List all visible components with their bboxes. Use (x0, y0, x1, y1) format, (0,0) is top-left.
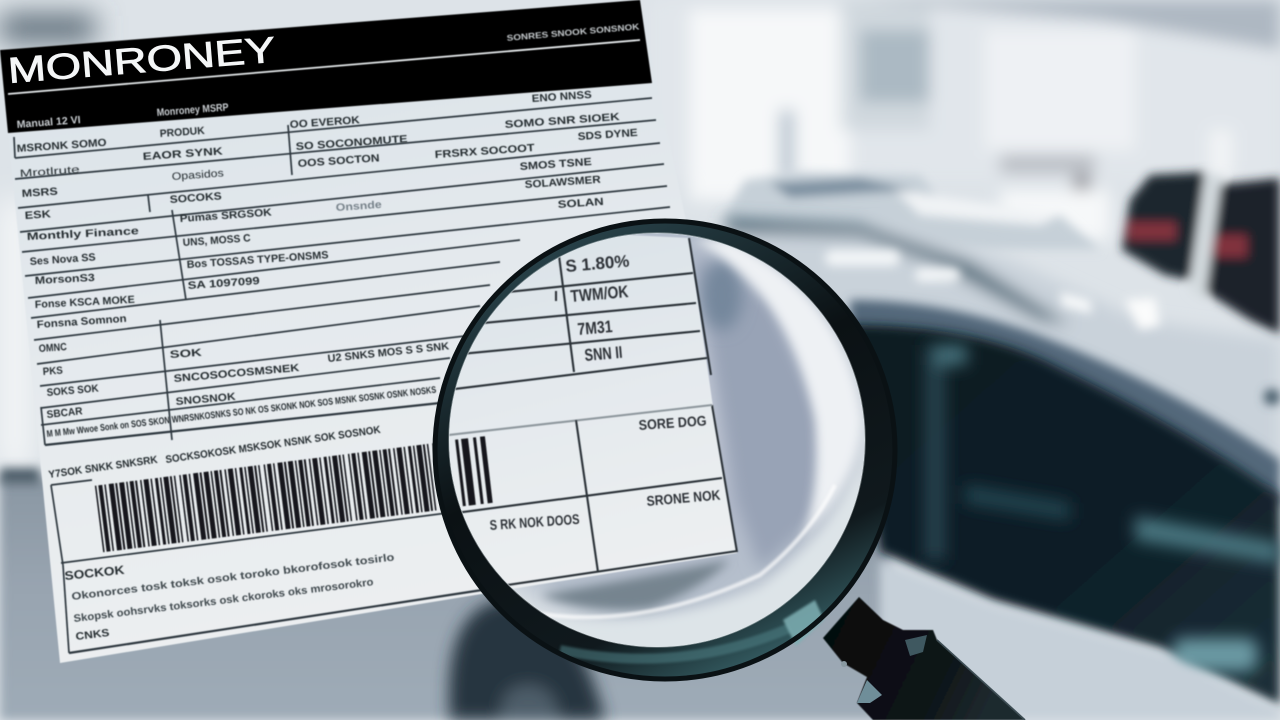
small print on sticker: Pumas SRGSOK (179, 207, 272, 225)
lower glass reflection (547, 478, 862, 647)
small print on sticker (16, 89, 638, 643)
magnified sticker paper (449, 234, 738, 589)
handle collar highlight (905, 635, 927, 656)
lens frame (433, 219, 897, 681)
small print on sticker: MSRS (21, 186, 58, 200)
small print on sticker: Bos TOSSAS TYPE-ONSMS (186, 249, 329, 271)
small print on sticker: PKS (42, 365, 63, 378)
small print on sticker: UNS, MOSS C (182, 232, 251, 249)
small print on sticker: SO SOCONOMUTE (295, 133, 408, 153)
barcode (99, 470, 489, 519)
sticker paper (16, 42, 483, 664)
left background strips (0, 15, 95, 470)
small print on sticker: FRSRX SOCOOT (434, 142, 536, 161)
distant car (725, 172, 1100, 250)
panel: Monroney sticker (0, 0, 738, 663)
small print on sticker: Fonsna Somnon (36, 313, 127, 331)
small print on sticker: OO EVEROK (289, 114, 360, 131)
car lower body (880, 560, 1280, 720)
small print on sticker: PRODUK (159, 125, 205, 140)
window reflections (925, 345, 1280, 672)
window frame rim (850, 300, 1280, 505)
small print on sticker: SOCKOK (64, 563, 125, 583)
magnified text: S RK NOK DOOS (489, 511, 580, 533)
magnified text: SORE DOG (638, 412, 707, 433)
small print on sticker: MorsonS3 (35, 272, 95, 287)
small print on sticker: Onsnde (335, 199, 382, 214)
small print on sticker: SOCKSOKOSK MSKSOK NSNK SOK SOSNOK (165, 424, 382, 466)
handle ferrule highlight (857, 680, 882, 703)
magnifying glass lens (430, 219, 897, 681)
lens inner highlight ring (449, 233, 865, 647)
small print on sticker: Monthly Finance (27, 225, 139, 243)
small print on sticker: SNOSNOK (175, 391, 236, 408)
small print on sticker: EAOR SYNK (142, 145, 224, 163)
small print on sticker: SNCOSOCOSMSNEK (173, 362, 300, 385)
small print on sticker: SA 1097099 (187, 275, 260, 292)
small print on sticker: SOMO SNR SIOEK (504, 111, 620, 131)
main car window (850, 325, 1280, 705)
small print on sticker: SOLAN (557, 196, 604, 211)
small print on sticker: Skopsk oohsrvks toksorks osk ckoroks oks mrosorokro (73, 576, 374, 625)
small print on sticker: SOKS SOK (46, 382, 99, 399)
magnified text: SRONE NOK (646, 487, 721, 509)
teal rim highlight (783, 600, 824, 646)
small print on sticker: Manual 12 VI (16, 114, 81, 131)
magnified text: SNN II (584, 343, 623, 365)
floor shadow left of sticker (0, 468, 40, 484)
table rules (14, 98, 670, 653)
small print on sticker: ESK (24, 208, 52, 222)
header rule (8, 40, 640, 94)
small print on sticker: Mrotlrute (19, 164, 80, 180)
reflected car shading (695, 255, 825, 570)
lens interior (449, 233, 865, 647)
title: MONRONEY: MONRONEY (6, 29, 277, 91)
barcode inside lens (459, 469, 493, 473)
outer edge (435, 221, 895, 679)
small print on sticker: U2 SNKS MOS S S SNK (327, 340, 450, 365)
teal lower rim band (560, 628, 790, 659)
small print on sticker: M M Mw Wwoe Sonk on SOS SKON WNRSNKOSNKS SO NK OS SKONK NOK SOS MSNK SOSNK OSNK NOSKS (46, 385, 437, 440)
showroom wall and ceiling (650, 0, 1280, 240)
small print on sticker: Monroney MSRP (156, 101, 229, 119)
small print on sticker: SMOS TSNE (519, 156, 592, 173)
small print on sticker: Opasidos (171, 167, 224, 183)
small print on sticker: OMNC (38, 341, 67, 355)
magnified text: 7M31 (577, 317, 613, 339)
main car body (700, 218, 1280, 480)
small print on sticker: OOS SOCTON (297, 152, 380, 170)
magnified text: I (554, 288, 558, 305)
small print on sticker: ENO NNSS (531, 89, 592, 105)
dark reflection at top of lens (702, 260, 742, 330)
small print on sticker: Fonse KSCA MOKE (35, 294, 135, 311)
small print on sticker: CNKS (75, 627, 110, 643)
far dark cars (1122, 172, 1280, 335)
header band (0, 0, 652, 133)
floor (0, 478, 890, 720)
body highlights (825, 250, 1280, 405)
magnified text: TWM/OK (570, 282, 630, 306)
small print on sticker: SOLAWSMER (524, 174, 601, 191)
handle rivet (841, 661, 847, 667)
wheel (449, 600, 605, 720)
handle edge highlight (937, 640, 1025, 720)
small print on sticker: SOCOKS (169, 190, 222, 206)
small print on sticker: Y7SOK SNKK SNKSRK (48, 454, 159, 481)
small print on sticker: MSRONK SOMO (16, 137, 107, 155)
small print on sticker: SDS DYNE (577, 127, 638, 143)
magnified text (489, 251, 721, 533)
small print on sticker: SBCAR (46, 405, 84, 421)
lens table rules (430, 238, 737, 595)
small print on sticker: SOK (169, 347, 203, 361)
magnifying glass handle (823, 597, 1025, 720)
magnified text: S 1.80% (565, 251, 630, 276)
small print on sticker: Ses Nova SS (29, 251, 96, 268)
header note: SONRES SNOOK SONSNOK (506, 21, 641, 43)
small print on sticker: Okonorces tosk toksk osok toroko bkorofosok tosirlo (71, 551, 395, 603)
